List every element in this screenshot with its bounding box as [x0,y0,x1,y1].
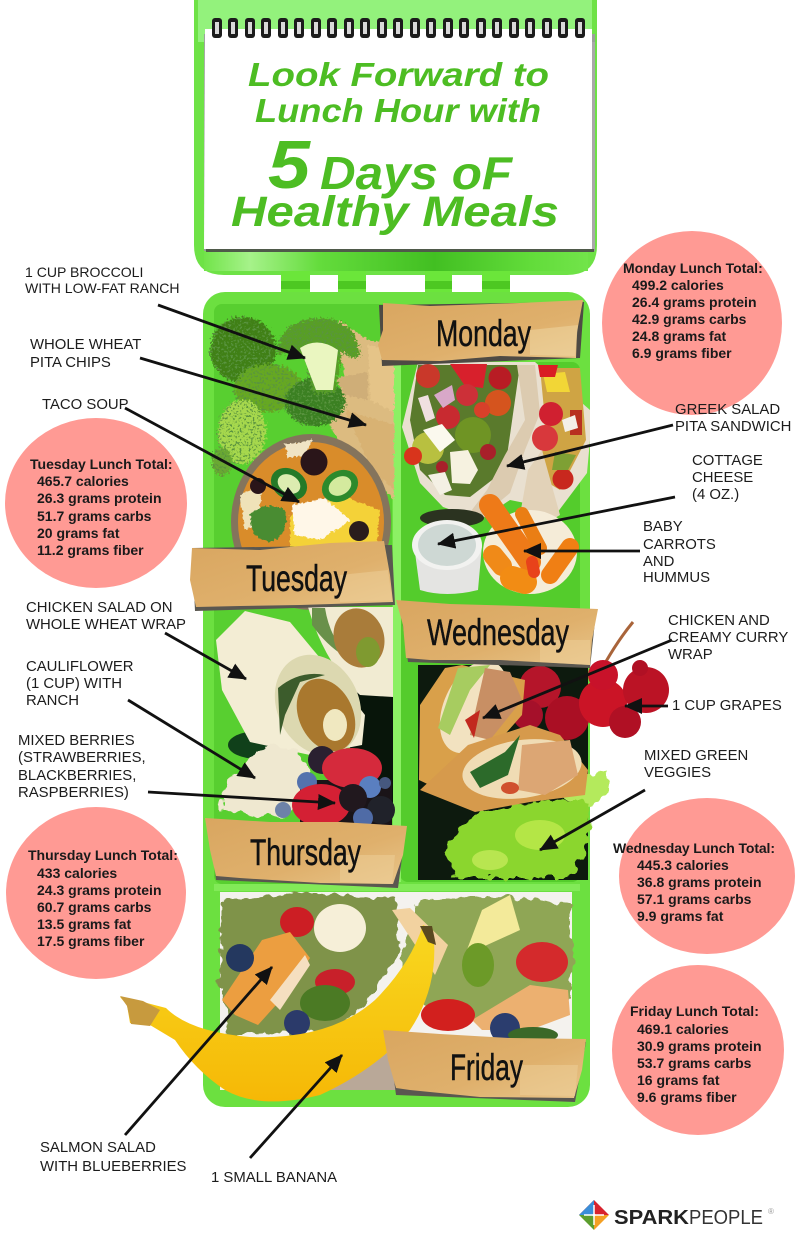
Monday totals callout: 26.4 grams protein [632,294,756,310]
Friday totals callout: 30.9 grams protein [637,1038,762,1054]
Monday paper tag [378,300,584,366]
title: Look Forward to [248,56,549,93]
food labels: (STRAWBERRIES, [18,750,146,766]
lid hinges [281,271,510,297]
mixed green veggies [445,770,610,878]
food labels: WHOLE WHEAT [30,337,141,353]
Monday totals callout: 6.9 grams fiber [632,345,732,361]
food labels: BLACKBERRIES, [18,768,136,784]
food labels: CHICKEN SALAD ON [26,600,172,616]
food labels: CHEESE [692,470,753,486]
food labels: PITA SANDWICH [675,419,791,435]
Monday totals callout [602,231,782,415]
Tuesday paper tag [190,541,395,611]
food labels: RASPBERRIES) [18,785,129,801]
mixed berries [275,746,395,828]
Tuesday totals callout: 465.7 calories [37,473,129,489]
Wednesday totals callout: 9.9 grams fat [637,908,724,924]
food labels: 1 SMALL BANANA [211,1170,337,1186]
chicken and creamy curry wrap [419,650,588,812]
Thursday food: chicken salad wrap, cauliflower, berries [216,602,395,828]
cauliflower [221,745,312,815]
Wednesday paper tag: Wednesday [427,612,569,653]
Tuesday totals callout: 11.2 grams fiber [37,542,144,558]
Tuesday totals callout [5,418,187,588]
food labels: CARROTS [643,537,716,553]
lunch box lid [194,0,597,275]
Wednesday totals callout: 36.8 grams protein [637,874,762,890]
Monday totals callout: 24.8 grams fat [632,328,726,344]
title: Days oF [320,147,514,199]
Friday totals callout: Friday Lunch Total: [630,1003,759,1019]
Friday totals callout: 9.6 grams fiber [637,1089,737,1105]
taco soup bowl [231,434,391,610]
notebook page [204,29,595,252]
Tuesday totals callout: Tuesday Lunch Total: [30,456,173,472]
arrows [125,305,675,1158]
Thursday totals callout: 17.5 grams fiber [37,933,145,949]
Monday totals callout: 499.2 calories [632,277,724,293]
Thursday totals callout: 433 calories [37,865,117,881]
Thursday totals callout: 24.3 grams protein [37,882,162,898]
Wednesday totals callout: Wednesday Lunch Total: [613,840,775,856]
food labels: GREEK SALAD [675,402,780,418]
SparkPeople logo: SPARK [614,1207,690,1229]
Friday totals callout: 53.7 grams carbs [637,1055,752,1071]
Friday totals callout [612,965,784,1135]
chicken salad wrap [216,602,393,769]
broccoli [210,317,360,476]
Wednesday paper tag [396,600,598,668]
banana [120,925,436,1101]
cottage cheese cup [412,520,482,594]
food labels: SALMON SALAD [40,1140,156,1156]
food labels [18,264,791,1186]
food labels: MIXED GREEN [644,748,748,764]
Thursday totals callout: Thursday Lunch Total: [28,847,178,863]
lunch box base [203,292,590,1107]
Wednesday food: curry wraps, grapes, green veggies [418,622,669,880]
title: Lunch Hour with [255,92,541,129]
SparkPeople logo [579,1200,774,1230]
Thursday totals callout: 13.5 grams fat [37,916,131,932]
Monday food: Greek salad pita, cottage cheese, carrots [402,362,590,594]
food labels: WHOLE WHEAT WRAP [26,617,186,633]
food labels: VEGGIES [644,765,711,781]
food labels: COTTAGE [692,453,763,469]
Friday paper tag: Friday [450,1047,523,1088]
Tuesday totals callout: 26.3 grams protein [37,490,162,506]
Friday totals callout: 469.1 calories [637,1021,729,1037]
food labels: CREAMY CURRY [668,630,788,646]
food labels: AND [643,554,675,570]
food labels: WITH LOW-FAT RANCH [25,280,180,296]
Tuesday food: broccoli, pita chips, taco soup [210,317,394,610]
spiral binding [212,18,585,38]
Wednesday totals callout: 57.1 grams carbs [637,891,752,907]
Thursday totals callout [6,807,186,979]
Tuesday totals callout: 20 grams fat [37,525,120,541]
Thursday paper tag: Thursday [250,832,361,873]
Friday paper tag [383,1030,586,1102]
Friday food: salmon salad [220,892,572,1090]
food labels: BABY [643,519,683,535]
Monday paper tag: Monday [436,313,531,354]
Friday totals callout: 16 grams fat [637,1072,720,1088]
pita chips [330,320,394,500]
Greek salad pita sandwich [402,362,590,528]
title [231,56,559,236]
food labels: CAULIFLOWER [26,659,134,675]
food labels: TACO SOUP [42,397,129,413]
Tuesday paper tag: Tuesday [246,558,347,599]
food labels: 1 CUP GRAPES [672,698,782,714]
food labels: (1 CUP) WITH [26,676,122,692]
Wednesday totals callout [613,798,795,954]
food labels: WITH BLUEBERRIES [40,1159,187,1175]
SparkPeople logo: ® [768,1207,774,1216]
title: 5 [268,127,311,203]
food labels: RANCH [26,693,79,709]
Thursday totals callout: 60.7 grams carbs [37,899,152,915]
grapes [513,622,669,740]
Monday totals callout: 42.9 grams carbs [632,311,747,327]
Tuesday totals callout: 51.7 grams carbs [37,508,152,524]
food labels: (4 OZ.) [692,487,739,503]
Thursday paper tag [205,818,407,888]
baby carrots and hummus [483,505,577,594]
food labels: WRAP [668,647,713,663]
Monday totals callout: Monday Lunch Total: [623,260,763,276]
food labels: 1 CUP BROCCOLI [25,264,143,280]
SparkPeople logo: PEOPLE [689,1207,763,1229]
food labels: HUMMUS [643,570,710,586]
Wednesday totals callout: 445.3 calories [637,857,729,873]
food labels: PITA CHIPS [30,355,111,371]
food labels: MIXED BERRIES [18,733,135,749]
title: Healthy Meals [231,188,559,236]
food labels: CHICKEN AND [668,613,770,629]
